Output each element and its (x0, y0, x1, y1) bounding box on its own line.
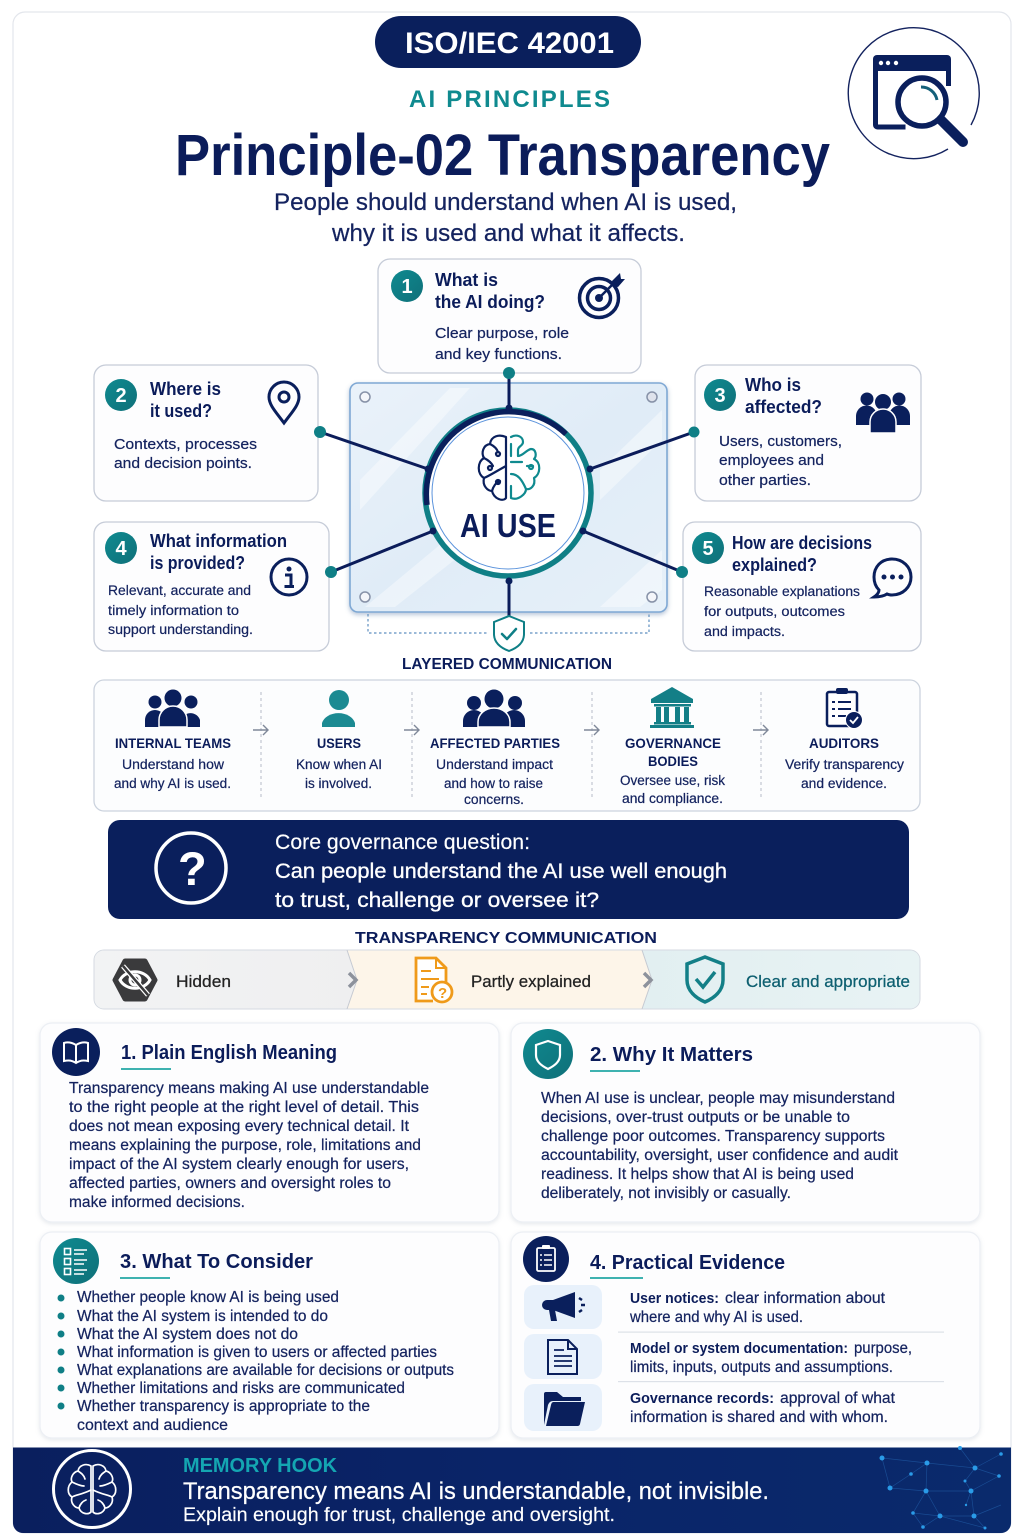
evidence item: governance records: Governance records: (630, 1390, 774, 1407)
internal teams (114, 690, 231, 791)
users (296, 690, 382, 791)
card 3: who is affected: employees and (719, 453, 824, 469)
bullet list: What the AI system is intended to do (77, 1308, 328, 1325)
panel 3: what to consider (40, 1232, 499, 1438)
card 5: how are decisions explained: How are decisions (732, 533, 872, 553)
panel 2: why it matters: deliberately, not invisibly or casually. (541, 1185, 791, 1202)
partly explained stage (416, 958, 591, 1002)
affected parties (430, 690, 560, 807)
affected parties: and how to raise (444, 776, 543, 791)
panel 2: why it matters: When AI use is unclear, people may misunderstand (541, 1090, 895, 1107)
panel 4: practical evidence: 4. Practical Evidence (590, 1252, 785, 1274)
card 5: how are decisions explained: for outputs, outcomes (704, 604, 845, 619)
evidence item: user notices: User notices: (630, 1290, 719, 1307)
card 3: who is affected: affected? (745, 397, 822, 417)
evidence item: governance records (630, 1390, 896, 1426)
intro text: why it is used and what it affects. (331, 220, 685, 247)
footer: memory hook: MEMORY HOOK (183, 1455, 338, 1477)
icon: checklist (53, 1238, 99, 1284)
affected parties: AFFECTED PARTIES (430, 735, 560, 751)
evidence item: user notices: where and why AI is used. (629, 1309, 803, 1326)
affected parties: Understand impact (436, 757, 553, 772)
panel 4: practical evidence (511, 1232, 980, 1438)
intro text: People should understand when AI is used, (274, 189, 737, 216)
hidden stage: Hidden (176, 972, 231, 991)
icon: question mark (156, 833, 226, 903)
icon: brain (479, 436, 539, 500)
evidence item: model or system documentation: purpose, (854, 1340, 912, 1357)
card 1: what is the AI doing: and key functions. (435, 347, 562, 363)
bullet list: What information is given to users or affected parties (77, 1344, 437, 1361)
card 1: what is the AI doing (378, 259, 641, 373)
card 2: where is it used: it used? (150, 401, 212, 421)
panel 2: why it matters (511, 1023, 980, 1222)
panel: glass plate (350, 383, 667, 612)
card 5: how are decisions explained: explained? (732, 555, 817, 575)
panel 1: plain english meaning: does not mean exposing every technical detail. It (69, 1118, 410, 1135)
card 4: what information is provided: support understanding. (108, 622, 253, 637)
intro text (274, 189, 737, 247)
icon: location pin (269, 382, 299, 423)
panel 2: why it matters: 2. Why It Matters (590, 1044, 753, 1066)
card 5: how are decisions explained: and impacts. (704, 624, 785, 639)
governance bodies: Oversee use, risk (620, 773, 725, 788)
title: Principle-02 Transparency (175, 123, 830, 188)
heading: transparency communication: TRANSPARENCY COMMUNICATION (355, 930, 657, 947)
card 2: where is it used (94, 365, 318, 501)
badge: ISO/IEC 42001: ISO/IEC 42001 (405, 27, 614, 60)
auditors: AUDITORS (809, 735, 879, 751)
footer: memory hook: Transparency means AI is understandable, not invisible. (183, 1478, 769, 1505)
evidence item: model or system documentation (630, 1340, 912, 1376)
icon: info (271, 559, 307, 595)
footer: memory hook: Explain enough for trust, challenge and oversight. (183, 1505, 615, 1526)
icon: book (52, 1028, 100, 1076)
card 2: where is it used: Contexts, processes (114, 437, 257, 453)
icon: megaphone (524, 1285, 602, 1329)
users: USERS (317, 735, 361, 751)
icon: shield check (494, 616, 524, 651)
card 4: what information is provided: What information (150, 531, 287, 551)
bullet list: Whether transparency is appropriate to the (77, 1398, 370, 1415)
internal teams: INTERNAL TEAMS (115, 735, 231, 751)
card 4: what information is provided: Relevant, accurate and (108, 583, 251, 598)
panel 1: plain english meaning: affected parties, owners and oversight roles to (69, 1175, 391, 1192)
banner: core governance question (108, 820, 909, 919)
card 2: where is it used: and decision points. (114, 456, 252, 472)
auditors: and evidence. (801, 776, 887, 791)
panel 1: plain english meaning: make informed decisions. (69, 1194, 245, 1211)
governance bodies: BODIES (648, 753, 698, 769)
badge: ISO/IEC 42001 (375, 16, 641, 68)
banner: core governance question: Core governance question: (275, 831, 530, 854)
icon: question mark: ? (178, 842, 207, 895)
icon: window with magnifier (848, 28, 979, 159)
card 4: what information is provided (94, 522, 329, 651)
central circle: AI USE: AI USE (460, 507, 556, 544)
evidence item: user notices (629, 1290, 886, 1326)
panel 1: plain english meaning: to the right people at the right level of detail. This (69, 1099, 419, 1116)
clear and appropriate stage (687, 957, 910, 1002)
card 2: where is it used: Where is (150, 379, 221, 399)
icon: target (580, 273, 625, 318)
panel 2: why it matters: readiness. It helps show that AI is being used (541, 1166, 854, 1183)
bullet list: Whether limitations and risks are communicated (77, 1380, 405, 1397)
banner: core governance question: Can people understand the AI use well enough (275, 859, 727, 883)
hidden stage (115, 961, 231, 999)
icon: people (856, 392, 910, 433)
central circle: AI USE (424, 404, 594, 584)
banner: core governance question: to trust, challenge or oversee it? (275, 888, 599, 912)
panel 2: why it matters: challenge poor outcomes. Transparency supports (541, 1128, 885, 1145)
panel 2: why it matters: accountability, oversight, user confidence and audit (541, 1147, 899, 1164)
panel 1: plain english meaning: Transparency means making AI use understandable (69, 1080, 429, 1097)
panel 1: plain english meaning: impact of the AI system clearly enough for users, (69, 1156, 409, 1173)
card 4: what information is provided: timely information to (108, 603, 239, 618)
card 3: who is affected (695, 365, 921, 501)
panel 2: why it matters: decisions, over-trust outputs or be unable to (541, 1109, 850, 1126)
footer: memory hook (13, 1446, 1011, 1533)
evidence item: model or system documentation: Model or system documentation: (630, 1340, 848, 1357)
bullet list: Whether people know AI is being used (77, 1289, 339, 1306)
card 1: what is the AI doing: 1 (402, 276, 413, 298)
governance bodies: and compliance. (622, 791, 723, 806)
icon: document (524, 1334, 602, 1379)
panel 1: plain english meaning: 1. Plain English Meaning (121, 1042, 337, 1064)
card 3: who is affected: Users, customers, (719, 434, 842, 450)
card 1: what is the AI doing: What is (435, 270, 498, 290)
clear and appropriate stage: Clear and appropriate (746, 972, 910, 991)
spectrum bar (94, 950, 920, 1009)
heading: layered communication: LAYERED COMMUNICATION (402, 656, 612, 673)
users: is involved. (305, 776, 372, 791)
internal teams: Understand how (122, 757, 224, 772)
evidence item: governance records: information is shared and with whom. (630, 1409, 888, 1426)
internal teams: and why AI is used. (114, 776, 231, 791)
icon: clipboard (523, 1236, 569, 1282)
card 3: who is affected: other parties. (719, 473, 811, 489)
card 1: what is the AI doing: the AI doing? (435, 292, 545, 312)
evidence item: governance records: approval of what (780, 1390, 896, 1407)
icon: shield (523, 1029, 573, 1079)
card 3: who is affected: 3 (714, 385, 726, 407)
evidence item: model or system documentation: limits, inputs, outputs and assumptions. (630, 1359, 893, 1376)
users: Know when AI (296, 757, 382, 772)
bullet list (58, 1289, 454, 1434)
panel 1: plain english meaning (40, 1023, 499, 1222)
bullet list: What the AI system does not do (77, 1326, 298, 1343)
card 5: how are decisions explained: 5 (702, 538, 714, 560)
card 5: how are decisions explained (683, 522, 921, 651)
icon: brain in circle (54, 1450, 130, 1528)
network pattern (880, 1446, 1003, 1530)
panel: stakeholder strip (94, 680, 920, 811)
icon: folder (524, 1384, 602, 1431)
dashed bracket (368, 614, 649, 633)
connector lines (314, 367, 700, 617)
panel 1: plain english meaning: means explaining the purpose, role, limitations and (69, 1137, 421, 1154)
panel 3: what to consider: 3. What To Consider (120, 1251, 313, 1273)
affected parties: concerns. (464, 792, 524, 807)
card 4: what information is provided: is provided? (150, 553, 245, 573)
partly explained stage: ? (438, 985, 447, 1002)
card 4: what information is provided: 4 (116, 538, 128, 560)
partly explained stage: Partly explained (471, 972, 591, 991)
card 3: who is affected: Who is (745, 375, 801, 395)
card 1: what is the AI doing: Clear purpose, role (435, 326, 569, 342)
bullet list: What explanations are available for decisions or outputs (77, 1362, 454, 1379)
auditors (785, 688, 904, 791)
governance bodies: GOVERNANCE (625, 735, 721, 751)
card 2: where is it used: 2 (116, 385, 127, 407)
governance bodies (620, 687, 725, 806)
auditors: Verify transparency (785, 757, 904, 772)
evidence item: user notices: clear information about (725, 1290, 886, 1307)
card 5: how are decisions explained: Reasonable explanations (704, 584, 860, 599)
subtitle label: AI PRINCIPLES: AI PRINCIPLES (409, 86, 610, 113)
icon: chat bubble (874, 559, 911, 597)
bullet list: context and audience (77, 1417, 228, 1434)
